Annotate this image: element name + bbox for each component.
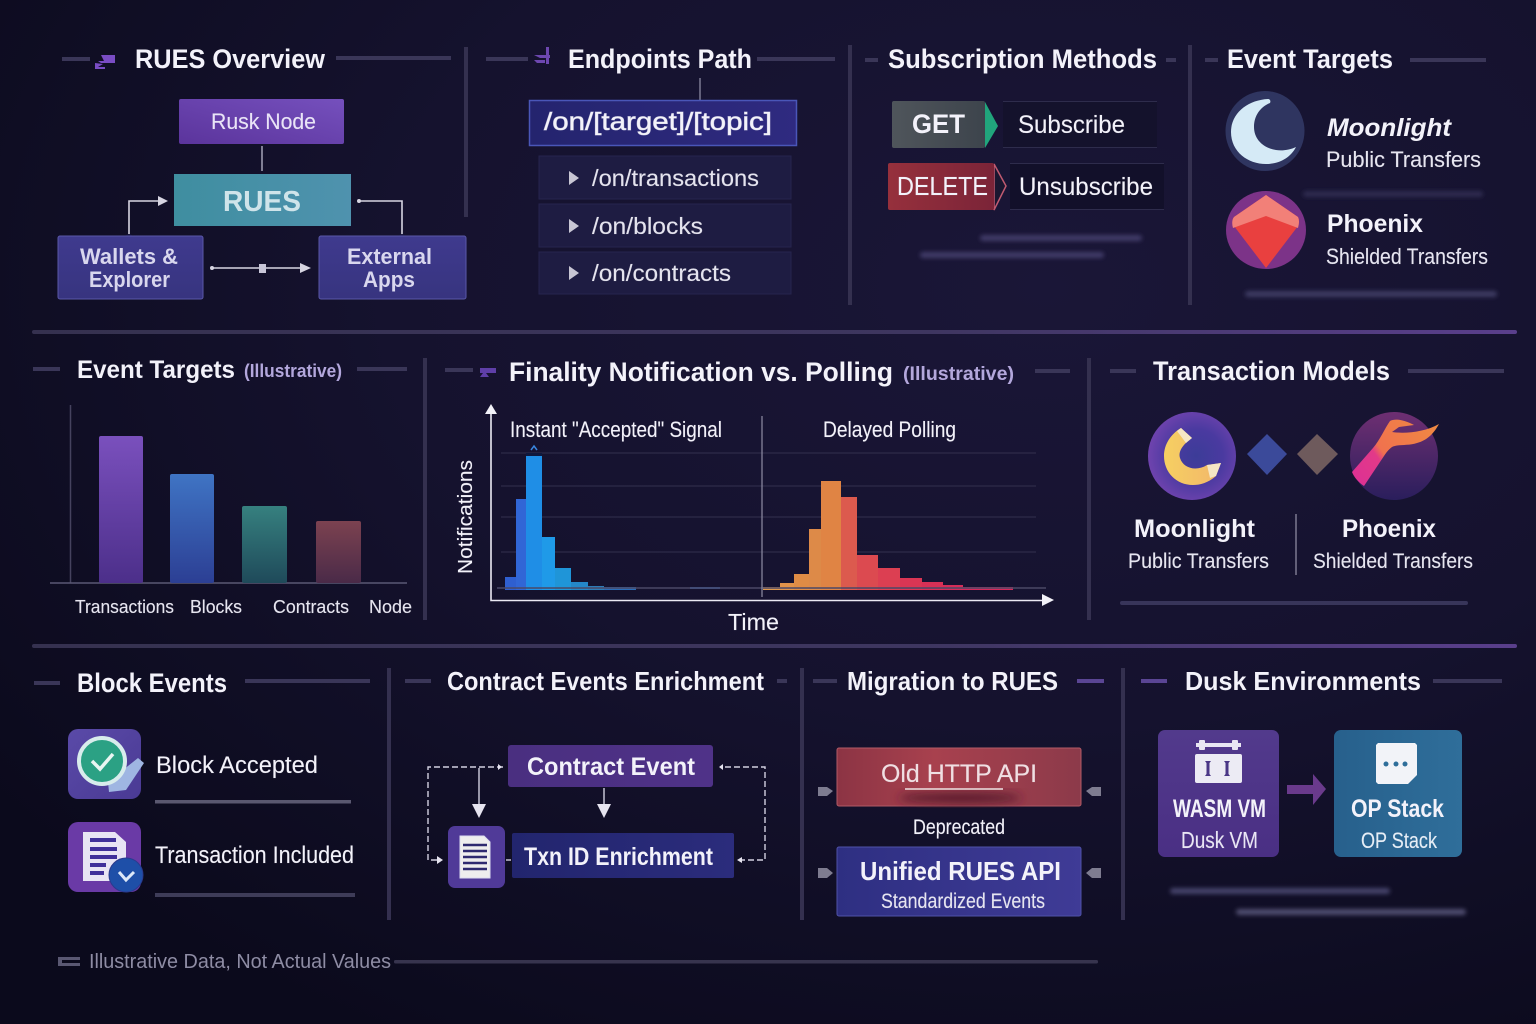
label: Moonlight: Moonlight <box>1134 515 1256 543</box>
card: WASM VM: WASM VM <box>1173 795 1266 823</box>
label: Phoenix: Shielded Transfers <box>1326 244 1488 269</box>
label: Delayed Polling: Delayed Polling <box>823 417 956 442</box>
node: RUES <box>174 174 351 226</box>
endpoint: contracts <box>539 252 791 294</box>
section divider: lower <box>32 644 1517 648</box>
node: Unified RUES API: Standardized Events <box>881 890 1045 913</box>
panel: Endpoints Path <box>486 44 835 294</box>
node: Txn ID Enrichment <box>512 833 734 878</box>
icon: Moonlight moon <box>1226 91 1304 171</box>
arrow: external apps to RUES <box>357 199 406 242</box>
center divider <box>761 416 763 597</box>
card: OP Stack <box>1334 730 1462 857</box>
chart axes <box>485 404 1054 606</box>
heading: Dusk Environments: Dusk Environments <box>1185 666 1421 696</box>
icon: finality flag <box>480 368 496 377</box>
card: WASM VM: Dusk VM <box>1181 827 1258 853</box>
heading: Block Events: Block Events <box>77 668 227 698</box>
node: Rusk Node: Rusk Node <box>211 109 316 134</box>
icon: chat document <box>1376 743 1417 784</box>
icon: endpoints <box>534 47 550 64</box>
panel: Migration to RUES <box>813 666 1104 916</box>
icon: blue diamond <box>1247 434 1287 475</box>
endpoint: transactions <box>539 156 791 199</box>
heading: Contract Events Enrichment: Contract Events Enrichment <box>447 666 764 696</box>
label: Moonlight: Moonlight <box>1327 114 1453 142</box>
label: Moonlight: Public Transfers <box>1326 147 1481 172</box>
arrow: wallets to external apps <box>210 263 311 273</box>
label: Phoenix: Phoenix <box>1342 515 1436 543</box>
heading: Endpoints Path: Endpoints Path <box>568 44 752 74</box>
panel: Dusk Environments <box>1141 666 1502 915</box>
panel: Transaction Models <box>1110 356 1504 605</box>
node: Unified RUES API <box>837 847 1081 916</box>
footer note <box>58 951 1098 973</box>
panel: Subscription Methods <box>865 44 1176 258</box>
heading: Migration to RUES: Migration to RUES <box>847 666 1058 696</box>
heading: RUES Overview: RUES Overview <box>135 44 326 74</box>
panel: Finality Notification vs. Polling <box>445 357 1070 635</box>
label: Instant Accepted Signal: Instant "Accepted" Signal <box>510 417 722 442</box>
arrows: dashed flow <box>428 764 765 864</box>
heading: Finality Notification vs. Polling (Illustrative): Finality Notification vs. Polling <box>509 357 893 387</box>
bar: Contracts <box>242 506 287 583</box>
heading: Event Targets (Illustrative): (Illustrative) <box>244 361 342 381</box>
bar: Node <box>316 521 361 583</box>
icon: brown diamond <box>1297 434 1338 475</box>
x-axis label: Time <box>728 609 779 635</box>
bar: Blocks <box>170 474 214 583</box>
label: Phoenix <box>1313 515 1473 573</box>
node: Contract Event: Contract Event <box>527 753 696 781</box>
axis labels: Contracts <box>273 597 349 617</box>
heading: Finality Notification vs. Polling (Illustrative): (Illustrative) <box>903 364 1014 385</box>
label: Deprecated: Deprecated <box>913 816 1005 839</box>
method: DELETE Unsubscribe: DELETE <box>897 171 988 201</box>
icon: document <box>448 826 505 888</box>
node: Wallets and Explorer: Explorer <box>89 267 170 292</box>
method: GET Subscribe <box>892 101 1157 148</box>
node: Wallets and Explorer <box>58 236 203 299</box>
icon: Phoenix gem <box>1226 191 1306 269</box>
label: Block Accepted: Block Accepted <box>156 752 318 779</box>
node: Old HTTP API <box>837 748 1081 806</box>
heading: Event Targets (Illustrative) <box>77 356 342 384</box>
blue histogram bars: instant signal <box>505 455 720 590</box>
card: WASM VM <box>1158 730 1279 857</box>
icon: footer bar <box>58 957 80 966</box>
endpoint: blocks <box>539 204 791 247</box>
icon: block accepted <box>68 729 144 799</box>
path template: /on/[target]/[topic] <box>544 108 772 136</box>
warm histogram bars: delayed polling <box>763 481 1013 590</box>
panel: Contract Events Enrichment <box>405 666 787 888</box>
node: Txn ID Enrichment: Txn ID Enrichment <box>524 843 714 871</box>
endpoint: blocks: /on/blocks <box>592 213 703 239</box>
icon: Phoenix badge <box>1350 412 1439 500</box>
node: Contract Event <box>508 745 713 787</box>
axis labels <box>75 597 412 617</box>
heading: Subscription Methods: Subscription Methods <box>888 44 1157 74</box>
method: GET Subscribe: GET <box>912 109 965 139</box>
label: Moonlight <box>1128 515 1269 573</box>
heading: Event Targets: Event Targets <box>1227 44 1393 74</box>
panel: Block Events <box>34 668 370 897</box>
node: Unified RUES API: Unified RUES API <box>860 856 1061 886</box>
arrows: migration markers <box>818 787 1101 878</box>
node: External Apps: Apps <box>363 267 415 292</box>
node: External Apps <box>319 236 466 299</box>
icon: Moonlight badge <box>1148 412 1236 500</box>
footer note: Illustrative Data, Not Actual Values <box>89 951 391 973</box>
histogram chart <box>455 404 1054 635</box>
arrow: WASM VM to OP Stack <box>1287 774 1326 805</box>
bar: Transactions <box>99 436 143 583</box>
heading: Event Targets (Illustrative): Event Targets <box>77 356 235 384</box>
heading: Transaction Models: Transaction Models <box>1153 356 1390 386</box>
method: DELETE Unsubscribe <box>888 163 1164 210</box>
panel: Event Targets (top) <box>1205 44 1497 297</box>
node: Wallets and Explorer: Wallets & <box>80 244 178 269</box>
node: RUES: RUES <box>223 186 301 218</box>
icon: overview flag <box>95 55 115 69</box>
bar chart <box>50 405 412 617</box>
label: Phoenix: Shielded Transfers <box>1313 550 1473 573</box>
node: Rusk Node <box>179 99 344 144</box>
label: Phoenix: Phoenix <box>1327 210 1423 238</box>
node: Old HTTP API: Old HTTP API <box>881 760 1037 788</box>
method: GET Subscribe: Subscribe <box>1018 111 1125 139</box>
path template <box>530 100 796 146</box>
icon: transaction included <box>68 822 143 892</box>
label: Moonlight: Public Transfers <box>1128 550 1269 573</box>
card: OP Stack: OP Stack <box>1351 795 1444 823</box>
panel: Event Targets chart <box>33 356 412 617</box>
card: OP Stack: OP Stack <box>1361 828 1438 853</box>
y-axis label: Notifications <box>455 460 477 574</box>
endpoint: contracts: /on/contracts <box>592 260 731 286</box>
node: External Apps: External <box>347 244 432 269</box>
label: Transaction Included: Transaction Included <box>155 842 354 869</box>
arrow: wallets to RUES <box>125 196 168 242</box>
section divider: upper <box>32 330 1517 334</box>
label: Phoenix <box>1326 210 1488 269</box>
method: DELETE Unsubscribe: Unsubscribe <box>1019 173 1153 201</box>
axis labels: Transactions <box>75 597 174 617</box>
axis labels: Blocks <box>190 597 242 617</box>
axis labels: Node <box>369 597 412 617</box>
endpoint: transactions: /on/transactions <box>592 165 759 191</box>
icon: VM blocks <box>1195 740 1242 783</box>
panel: RUES Overview <box>58 44 466 299</box>
label: Moonlight <box>1326 114 1481 172</box>
